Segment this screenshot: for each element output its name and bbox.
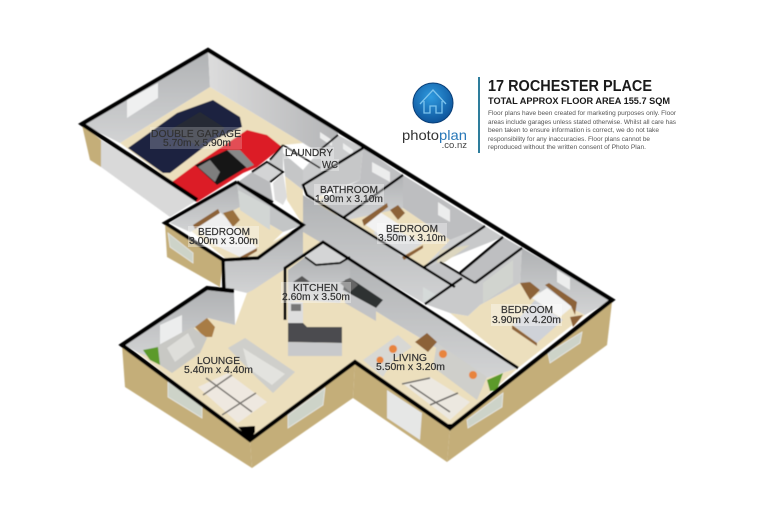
disclaimer text (488, 110, 677, 151)
subtitle: TOTAL APPROX FLOOR AREA 155.7 SQM (488, 96, 670, 107)
label: living: 5.50m x 3.20m (376, 361, 445, 373)
label: lounge: LOUNGE (197, 355, 240, 367)
label: double garage (150, 127, 242, 149)
disclaimer text: reproduced without the written consent of Photo Plan. (488, 144, 646, 151)
garage closets (238, 145, 287, 205)
living furniture (363, 333, 503, 420)
label: laundry: LAUNDRY (285, 147, 333, 159)
label: bedroom left: 3.00m x 3.00m (189, 235, 258, 247)
navy car (128, 100, 242, 173)
label: living: LIVING (393, 352, 427, 364)
label: bathroom (314, 184, 384, 205)
icon: house in blue circle (413, 83, 453, 123)
wall tops (82, 50, 612, 440)
label: bedroom right: 3.90m x 4.20m (492, 314, 561, 326)
disclaimer text: Floor plans have been created for marketing purposes only. Floor (488, 110, 677, 117)
label: bathroom: BATHROOM (320, 184, 378, 196)
label: living (376, 352, 445, 373)
exterior white walls and doors (101, 140, 422, 440)
cars (128, 100, 282, 202)
label: lounge (184, 355, 253, 376)
icon: plant (143, 347, 160, 365)
divider bar (478, 77, 480, 153)
title: 17 ROCHESTER PLACE (488, 78, 652, 95)
exterior windows (168, 233, 582, 428)
label: kitchen: KITCHEN (293, 282, 338, 294)
label: bedroom middle: BEDROOM (386, 223, 438, 235)
living corner (445, 424, 455, 431)
exterior brick walls (82, 125, 612, 468)
label: bedroom middle (377, 223, 447, 244)
label: double garage: DOUBLE GARAGE (151, 128, 241, 140)
floors (120, 87, 585, 440)
icon: living plant (487, 373, 503, 391)
label: bedroom middle: 3.50m x 3.10m (378, 232, 446, 244)
label: wc: WC (322, 159, 338, 171)
label: double garage: 5.70m x 5.90m (163, 137, 231, 149)
label: bedroom left: BEDROOM (198, 226, 250, 238)
label: bedroom right (491, 304, 562, 326)
lounge furniture (143, 318, 295, 423)
disclaimer text: responsibility for any inaccuracies. Floor plans cannot be (488, 136, 650, 143)
small windows (160, 132, 570, 347)
red car (172, 130, 282, 202)
room labels (150, 127, 562, 376)
disclaimer text: been taken to ensure information is correct, we do not take (488, 127, 659, 134)
interior walls (82, 50, 612, 378)
label: bedroom left (188, 226, 259, 247)
disclaimer text: areas include garages unless stated otherwise. Whilst all care has (488, 119, 676, 126)
label: bathroom: 1.90m x 3.10m (315, 193, 383, 205)
bedroom furniture (193, 203, 583, 346)
logo domain: .co.nz (442, 140, 467, 151)
kitchen units (288, 276, 383, 356)
logo: photoplan (402, 83, 467, 151)
label: bedroom right: BEDROOM (501, 304, 553, 316)
logo wordmark: photoplan (402, 127, 467, 143)
floor plan (82, 50, 612, 468)
lounge corner (238, 426, 255, 441)
label: lounge: 5.40m x 4.40m (184, 364, 253, 376)
label: kitchen (281, 282, 351, 303)
label: kitchen: 2.60m x 3.50m (282, 291, 350, 303)
